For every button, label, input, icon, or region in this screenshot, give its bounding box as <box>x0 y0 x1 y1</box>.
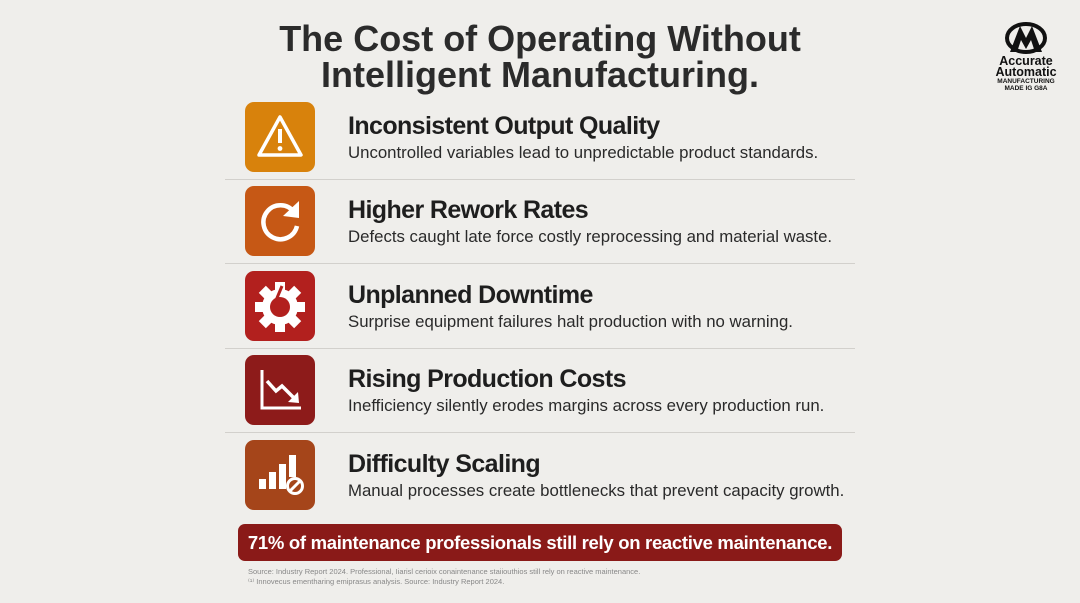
row 3: Unplanned Downtime <box>348 281 593 309</box>
logo: Automatic <box>995 65 1057 79</box>
logo: MANUFACTURING <box>997 78 1055 85</box>
source note: ⁽¹⁾ Innovecus ementharing emiprasus analysis. Source: Industry Report 2024. <box>248 576 504 586</box>
banner <box>238 524 842 561</box>
banner: 71% of maintenance professionals still rely on reactive maintenance. <box>248 532 832 553</box>
source note <box>248 567 640 586</box>
row 1: Uncontrolled variables lead to unpredictable product standards. <box>348 143 818 162</box>
row 1: Inconsistent Output Quality <box>348 112 660 140</box>
row 5 <box>245 440 844 510</box>
row 2: Higher Rework Rates <box>348 196 588 224</box>
row 3 <box>245 271 793 341</box>
icon: blocked bars <box>245 440 315 510</box>
row 2: Defects caught late force costly reprocessing and material waste. <box>348 227 832 246</box>
icon: declining chart <box>245 355 315 425</box>
row 1 <box>245 102 818 172</box>
row 4: Inefficiency silently erodes margins across every production run. <box>348 396 824 415</box>
row 2 <box>245 186 832 256</box>
title: Intelligent Manufacturing. <box>321 54 759 95</box>
logo: Accurate <box>999 54 1053 68</box>
row 5: Difficulty Scaling <box>348 450 540 478</box>
row 3: Surprise equipment failures halt production with no warning. <box>348 312 793 331</box>
icon: warning <box>245 102 315 172</box>
row 4: Rising Production Costs <box>348 365 626 393</box>
logo <box>995 22 1057 92</box>
logo: MADE IG G8A <box>1004 85 1047 92</box>
icon: broken gear <box>245 271 315 341</box>
source note: Source: Industry Report 2024. Professional, Iiarisl cerioix conaintenance staiiouthios still rely on reactive maintenance. <box>248 567 640 576</box>
row 4 <box>245 355 824 425</box>
title: The Cost of Operating Without <box>279 18 801 59</box>
icon: refresh <box>245 186 315 256</box>
title <box>279 18 801 95</box>
row 5: Manual processes create bottlenecks that prevent capacity growth. <box>348 481 844 500</box>
